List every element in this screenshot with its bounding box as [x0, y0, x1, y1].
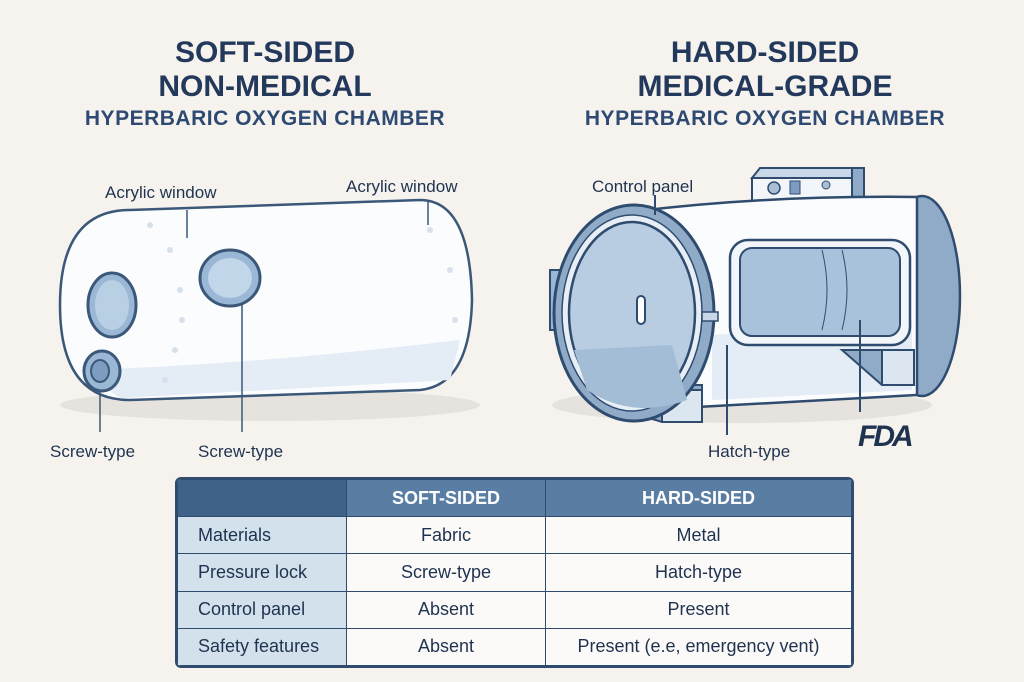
label: screw-type 1: Screw-type	[50, 442, 135, 461]
title: soft-sided: NON-MEDICAL	[158, 70, 372, 103]
icon: window left	[88, 273, 136, 337]
comparison table: Safety features	[198, 636, 319, 656]
comparison table: Fabric	[421, 525, 471, 545]
comparison table: HARD-SIDED	[642, 488, 755, 508]
label: hatch-type: Hatch-type	[708, 442, 790, 461]
comparison table: Absent	[418, 599, 474, 619]
title: hard-sided: MEDICAL-GRADE	[638, 70, 892, 103]
title: hard-sided: HYPERBARIC OXYGEN CHAMBER	[585, 107, 945, 130]
icon: viewing window	[730, 240, 910, 345]
comparison table: Present	[667, 599, 730, 619]
label: screw-type 2: Screw-type	[198, 442, 283, 461]
title: hard-sided: HARD-SIDED	[671, 36, 859, 69]
comparison table: Screw-type	[401, 562, 491, 582]
bases	[592, 385, 702, 422]
title: soft-sided: SOFT-SIDED	[175, 36, 355, 69]
label: control panel: Control panel	[592, 177, 693, 196]
comparison table: Present (e.e, emergency vent)	[577, 636, 820, 656]
comparison table	[175, 477, 854, 668]
icon: window top	[200, 250, 260, 306]
icon: hatch door	[550, 205, 718, 421]
icon: FDA logo: FDA	[858, 420, 911, 453]
illustration: hard chamber	[549, 167, 962, 435]
icon: screw valve	[84, 351, 120, 391]
label: acrylic window 2: Acrylic window	[346, 177, 457, 196]
comparison table: Hatch-type	[655, 562, 742, 582]
comparison table: Pressure lock	[198, 562, 307, 582]
comparison table: Materials	[198, 525, 271, 545]
comparison table: Control panel	[198, 599, 305, 619]
comparison table: Absent	[418, 636, 474, 656]
title: hard-sided	[585, 36, 945, 130]
icon: control panel	[752, 168, 864, 216]
comparison table: Metal	[676, 525, 720, 545]
comparison table: SOFT-SIDED	[392, 488, 500, 508]
label: acrylic window 1: Acrylic window	[105, 183, 216, 202]
title: soft-sided	[85, 36, 445, 130]
title: soft-sided: HYPERBARIC OXYGEN CHAMBER	[85, 107, 445, 130]
illustration: soft chamber	[58, 198, 480, 432]
